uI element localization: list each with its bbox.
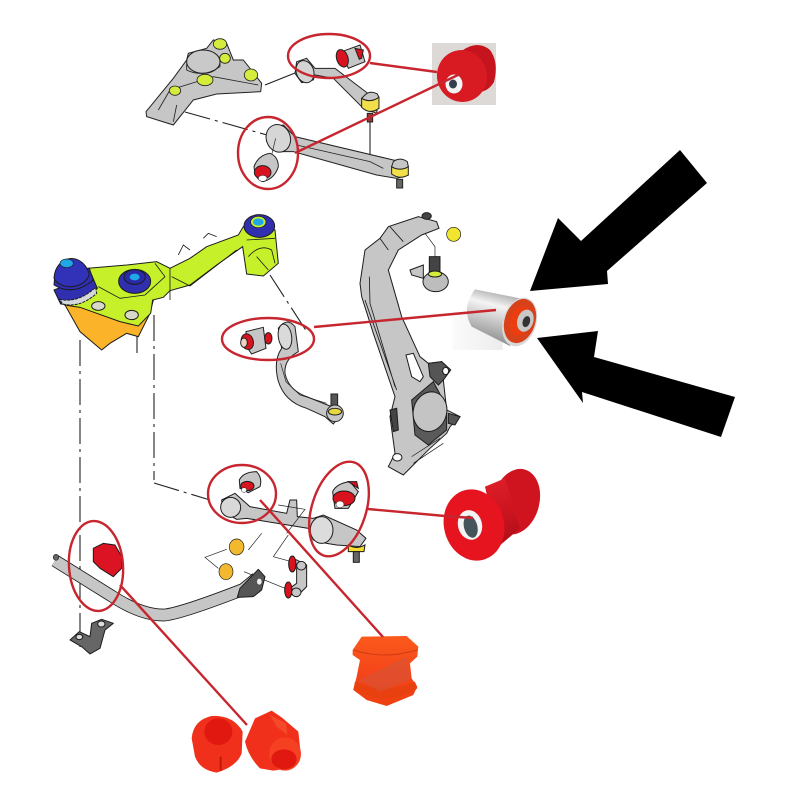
icon: lower arm front bushing	[333, 482, 358, 508]
icon: anti-roll bar bushing	[93, 543, 122, 577]
top strut mount plate	[146, 39, 262, 125]
photo: orange control arm bushing	[353, 636, 418, 706]
arrow: upper black arrow	[530, 150, 707, 291]
steering knuckle	[360, 213, 461, 475]
right stabilizer bushing	[245, 711, 301, 771]
icon: blue centre bushing	[119, 269, 151, 293]
icon: yellow-green mount nuts	[169, 39, 258, 95]
orange subframe section	[65, 300, 153, 350]
photo: top red bushing	[431, 43, 496, 108]
red leader lines	[120, 63, 496, 725]
icon: drop link	[285, 556, 307, 598]
lower front arm	[254, 121, 408, 188]
anti-roll bar	[53, 543, 265, 654]
icon: lower front arm bushing	[254, 153, 278, 182]
icon: ball joint	[410, 257, 448, 292]
upper front arm	[293, 45, 379, 122]
green subframe	[54, 215, 278, 350]
icon: rear arm bushing	[239, 327, 272, 354]
arrow: lower black arrow	[537, 331, 735, 437]
left stabilizer bushing	[192, 716, 243, 773]
icon: upper front arm bushing	[334, 45, 365, 69]
photo: large red bushing	[436, 463, 547, 568]
icon: blue front bushing with toothed ring	[54, 259, 97, 305]
lower control arm	[205, 472, 366, 598]
photo: pair of anti-roll bushings	[192, 711, 301, 773]
dashed assembly lines	[80, 73, 370, 650]
icon: lower arm rear bushing	[239, 472, 261, 493]
icon: blue rear bushing	[244, 215, 275, 237]
rear control arm	[239, 322, 343, 424]
photo: silver red-insert bushing	[453, 289, 543, 351]
icon: anti-roll bar clamp	[70, 619, 113, 654]
icon: knuckle yellow nut	[447, 227, 461, 241]
icon: yellow nuts	[219, 539, 244, 580]
red callout ellipses	[66, 34, 380, 613]
